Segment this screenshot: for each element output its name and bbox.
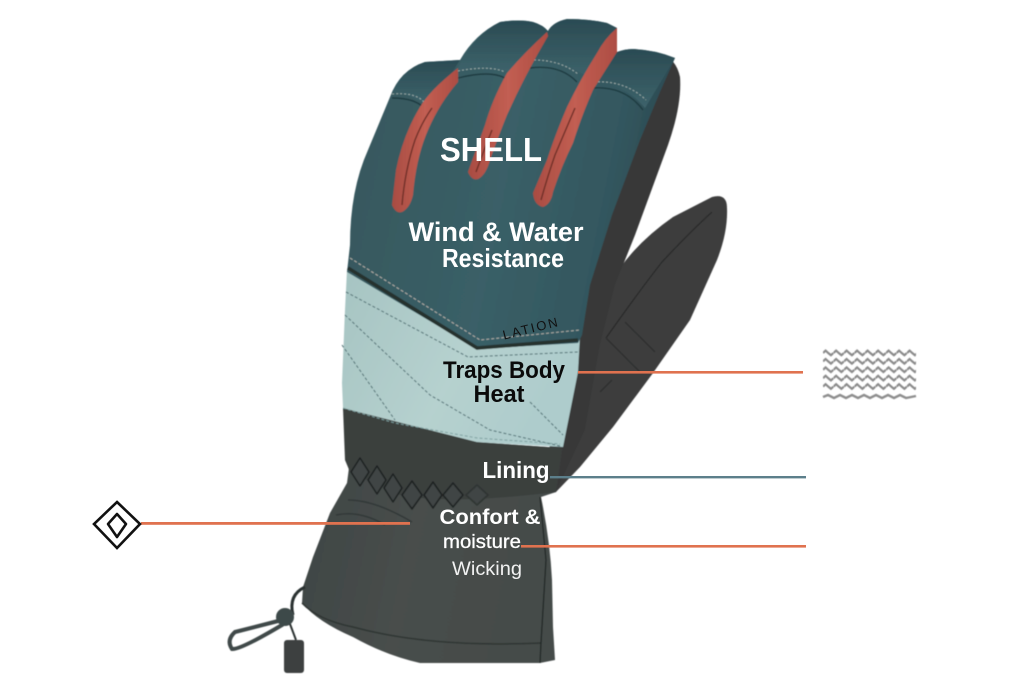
label: heat: Heat	[474, 381, 524, 408]
finger seams	[392, 67, 643, 110]
icon: diamond	[94, 502, 140, 548]
curved text: lation: LATION	[501, 314, 559, 343]
leader line: lining	[550, 476, 806, 478]
cord lock	[230, 587, 305, 673]
icon: insulation weave	[823, 349, 916, 398]
elastic shirring	[351, 458, 488, 509]
leader line: insulation	[578, 371, 803, 374]
cuff hem	[302, 603, 541, 644]
shell lower seam	[348, 268, 578, 348]
palm side back panel	[545, 54, 680, 495]
fingertips	[390, 60, 460, 104]
label: traps body: Traps Body	[443, 357, 566, 384]
cuff	[302, 408, 562, 663]
label: wicking: Wicking	[452, 559, 522, 580]
label: lining: Lining	[482, 457, 550, 483]
leader line: moisture	[521, 545, 806, 548]
shell	[347, 19, 675, 349]
insulation panel	[342, 270, 580, 447]
label: confort: Confort &	[440, 506, 540, 529]
thumb	[556, 196, 727, 492]
leader line: diamond icon	[141, 522, 410, 525]
glove illustration	[230, 19, 727, 673]
label: moisture: moisture	[443, 532, 521, 553]
label: wind and water: Wind & Water	[408, 217, 584, 247]
label: resistance: Resistance	[442, 243, 564, 273]
red gusset strips	[392, 68, 458, 212]
heading: shell: SHELL	[440, 131, 542, 168]
